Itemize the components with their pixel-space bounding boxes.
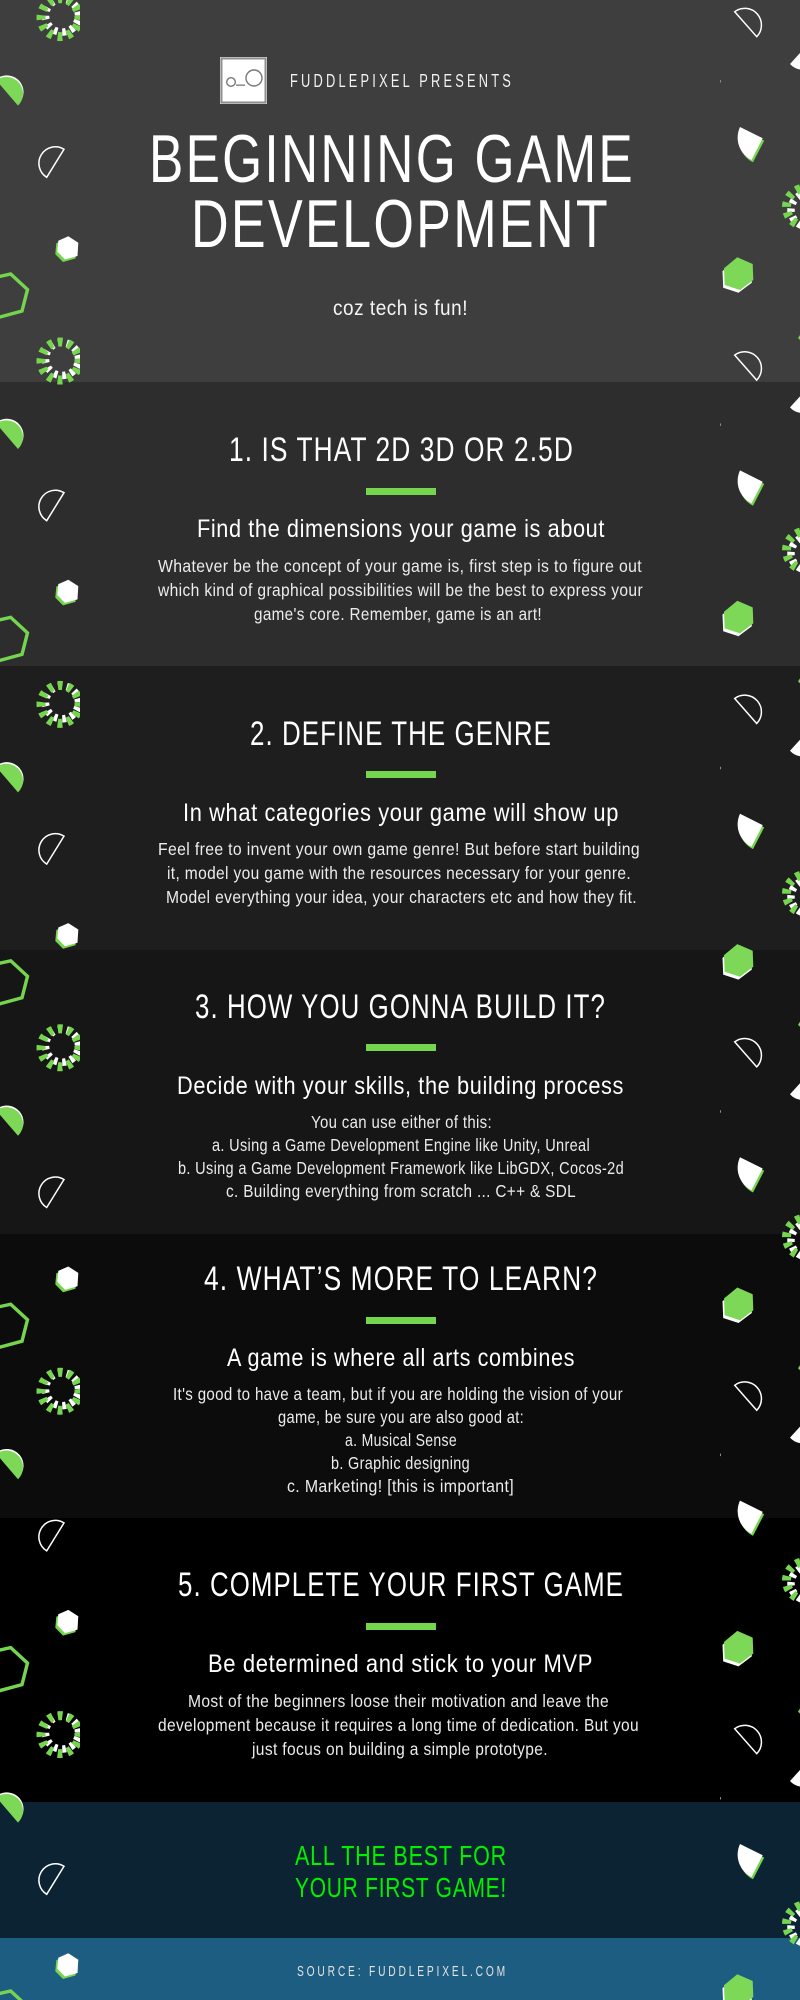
closing message: ALL THE BEST FOR bbox=[295, 1840, 507, 1871]
body text: It's good to have a team, but if you are holding the vision of your bbox=[173, 1384, 623, 1404]
section 3 content bbox=[177, 988, 624, 1201]
heading: step 1: 1. IS THAT 2D 3D OR 2.5D bbox=[229, 431, 574, 469]
heading: step 5: 5. COMPLETE YOUR FIRST GAME bbox=[178, 1566, 624, 1604]
panel: section 4 background bbox=[0, 1234, 800, 1518]
decorative shapes: tile row 4 bbox=[0, 1026, 800, 1370]
decorative shapes: tile row 6 bbox=[0, 1713, 800, 2000]
body text: Feel free to invent your own game genre! But before start building bbox=[158, 839, 640, 859]
body text bbox=[158, 839, 640, 907]
title: BEGINNING GAME bbox=[149, 121, 635, 197]
body text: game's core. Remember, game is an art! bbox=[254, 604, 542, 624]
section 5 content bbox=[158, 1566, 639, 1759]
panel: section 5 background bbox=[0, 1518, 800, 1802]
body text: b. Using a Game Development Framework like LibGDX, Cocos-2d bbox=[178, 1158, 624, 1178]
icon: fuddlepixel logo bbox=[220, 57, 267, 104]
body text: c. Building everything from scratch ... C++ & SDL bbox=[226, 1181, 576, 1201]
body text: b. Graphic designing bbox=[331, 1453, 470, 1473]
panel: section 3 background bbox=[0, 950, 800, 1234]
subheading: A game is where all arts combines bbox=[227, 1344, 575, 1372]
accent bar bbox=[366, 488, 436, 495]
body text: just focus on building a simple prototype. bbox=[251, 1739, 548, 1759]
body text: Model everything your idea, your characters etc and how they fit. bbox=[166, 887, 637, 907]
body text: a. Musical Sense bbox=[345, 1430, 457, 1450]
decorative shapes: tile row 5 bbox=[0, 1369, 800, 1714]
title: DEVELOPMENT bbox=[191, 186, 610, 262]
title bbox=[149, 121, 635, 262]
body text: development because it requires a long time of dedication. But you bbox=[158, 1715, 639, 1735]
body text: c. Marketing! [this is important] bbox=[287, 1476, 514, 1496]
subheading: Find the dimensions your game is about bbox=[197, 515, 605, 543]
panel: section 1 background bbox=[0, 382, 800, 666]
subheading: Decide with your skills, the building process bbox=[177, 1072, 624, 1100]
source credit: SOURCE: FUDDLEPIXEL.COM bbox=[297, 1964, 508, 1980]
decorative shapes: tile row 2 bbox=[0, 339, 800, 683]
body text: game, be sure you are also good at: bbox=[278, 1407, 524, 1427]
panel: header background bbox=[0, 0, 800, 382]
accent bar bbox=[366, 1317, 436, 1324]
closing message: YOUR FIRST GAME! bbox=[295, 1872, 507, 1903]
accent bar bbox=[366, 1623, 436, 1630]
decorative shapes: tile row 1 bbox=[0, 0, 800, 340]
panel: section 2 background bbox=[0, 666, 800, 950]
heading: step 4: 4. WHAT’S MORE TO LEARN? bbox=[204, 1260, 598, 1298]
decorative shapes: tile row 3 bbox=[0, 682, 800, 1027]
body text bbox=[173, 1384, 623, 1496]
body text: You can use either of this: bbox=[311, 1112, 492, 1132]
accent bar bbox=[366, 771, 436, 778]
body text bbox=[157, 556, 643, 624]
heading: step 3: 3. HOW YOU GONNA BUILD IT? bbox=[195, 988, 606, 1026]
heading: step 2: 2. DEFINE THE GENRE bbox=[250, 715, 552, 753]
body text: Most of the beginners loose their motivation and leave the bbox=[188, 1691, 609, 1711]
panel: source footer background bbox=[0, 1938, 800, 2000]
accent bar bbox=[366, 1044, 436, 1051]
body text bbox=[158, 1691, 639, 1759]
panel: closing banner background bbox=[0, 1802, 800, 1938]
subheading: Be determined and stick to your MVP bbox=[208, 1650, 593, 1678]
body text: Whatever be the concept of your game is, first step is to figure out bbox=[158, 556, 642, 576]
tagline: coz tech is fun! bbox=[333, 296, 468, 320]
subheading: In what categories your game will show up bbox=[183, 799, 619, 827]
section 4 content bbox=[173, 1260, 623, 1496]
body text: a. Using a Game Development Engine like Unity, Unreal bbox=[212, 1135, 590, 1155]
presenter label: FUDDLEPIXEL PRESENTS bbox=[290, 71, 514, 91]
closing message bbox=[295, 1840, 507, 1903]
section 2 content bbox=[158, 715, 640, 907]
section 1 content bbox=[157, 431, 643, 624]
body text: which kind of graphical possibilities will be the best to express your bbox=[157, 580, 643, 600]
body text: it, model you game with the resources necessary for your genre. bbox=[167, 863, 631, 883]
body text bbox=[178, 1112, 624, 1201]
